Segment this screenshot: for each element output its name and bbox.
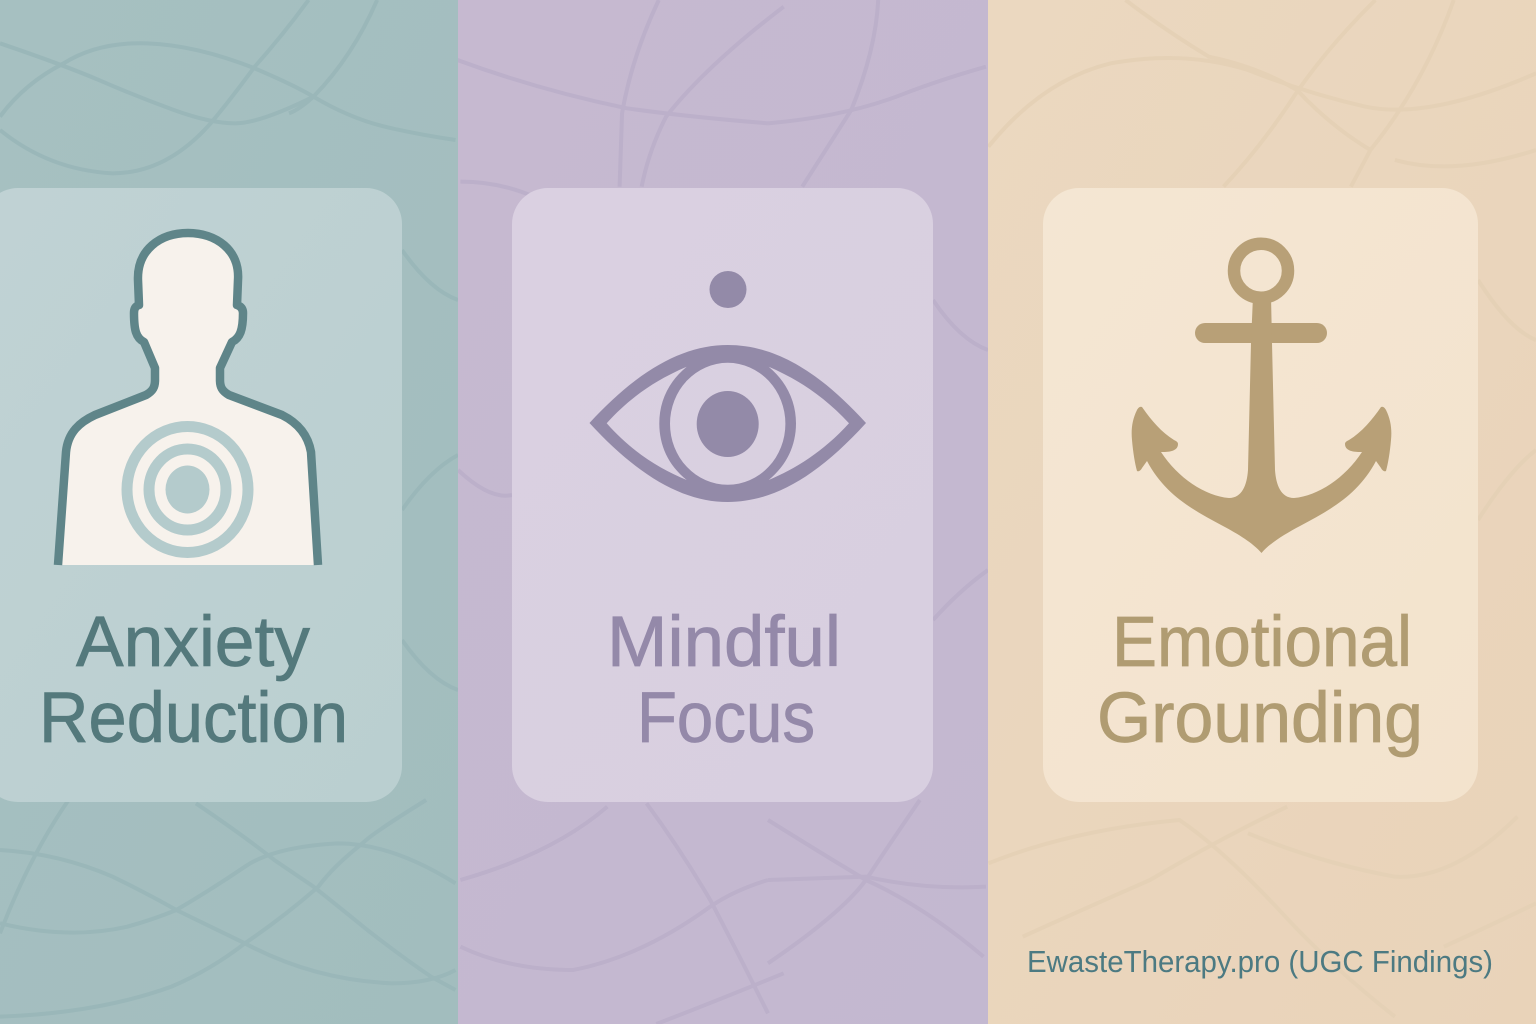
- card: anxiety reduction: [0, 188, 402, 802]
- card: mindful focus: [512, 188, 933, 802]
- heading: Anxiety Reduction: Reduction: [39, 679, 348, 758]
- icon: eye with dot above: [590, 271, 866, 502]
- icon: anchor: [1132, 244, 1391, 553]
- icon: human torso with concentric rings: [58, 233, 318, 565]
- panel: mindful focus: [457, 0, 988, 1024]
- card: emotional grounding: [1043, 188, 1478, 802]
- heading: Mindful Focus: [607, 603, 841, 758]
- heading: Anxiety Reduction: Anxiety: [76, 603, 310, 682]
- heading: Mindful Focus: Mindful: [607, 603, 841, 682]
- heading: Emotional Grounding: [1097, 603, 1423, 758]
- panel: emotional grounding: [988, 0, 1536, 1024]
- heading: Anxiety Reduction: [39, 603, 348, 758]
- source credit: EwasteTherapy.pro (UGC Findings): [1027, 944, 1493, 979]
- heading: Emotional Grounding: Grounding: [1097, 679, 1423, 758]
- heading: Mindful Focus: Focus: [637, 679, 815, 758]
- panel: anxiety reduction: [0, 0, 458, 1024]
- heading: Emotional Grounding: Emotional: [1112, 603, 1412, 682]
